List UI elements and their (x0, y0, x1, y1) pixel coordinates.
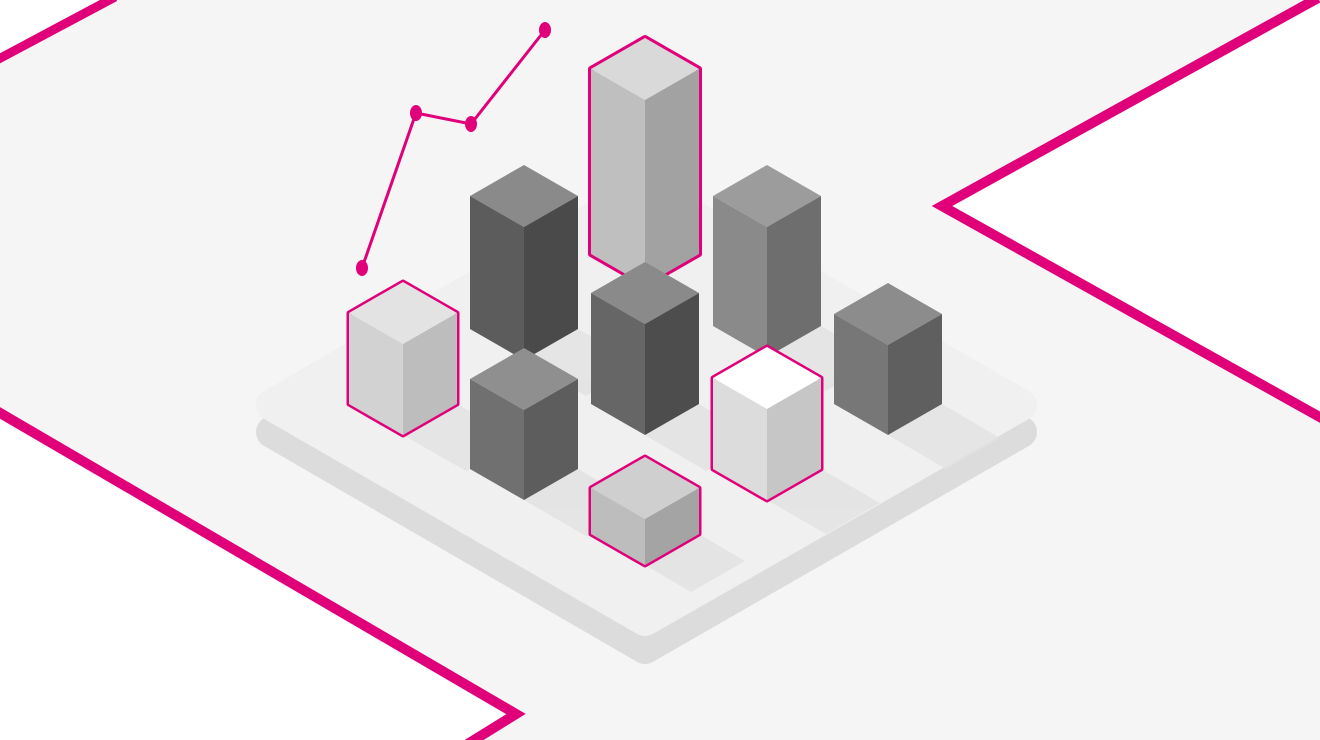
bar: tall highlighted (591, 38, 699, 285)
bar: highlighted left (349, 282, 457, 435)
platform (272, 188, 1021, 648)
bar: dark back left (470, 165, 578, 360)
bar: center dark (591, 262, 699, 435)
line chart (356, 22, 551, 276)
bar: highlighted white top (713, 347, 821, 500)
bar: back right (713, 165, 821, 357)
bar: small highlighted front (591, 457, 699, 565)
bar: right (834, 283, 942, 435)
bar: front left (470, 348, 578, 500)
shadows (403, 326, 1000, 592)
